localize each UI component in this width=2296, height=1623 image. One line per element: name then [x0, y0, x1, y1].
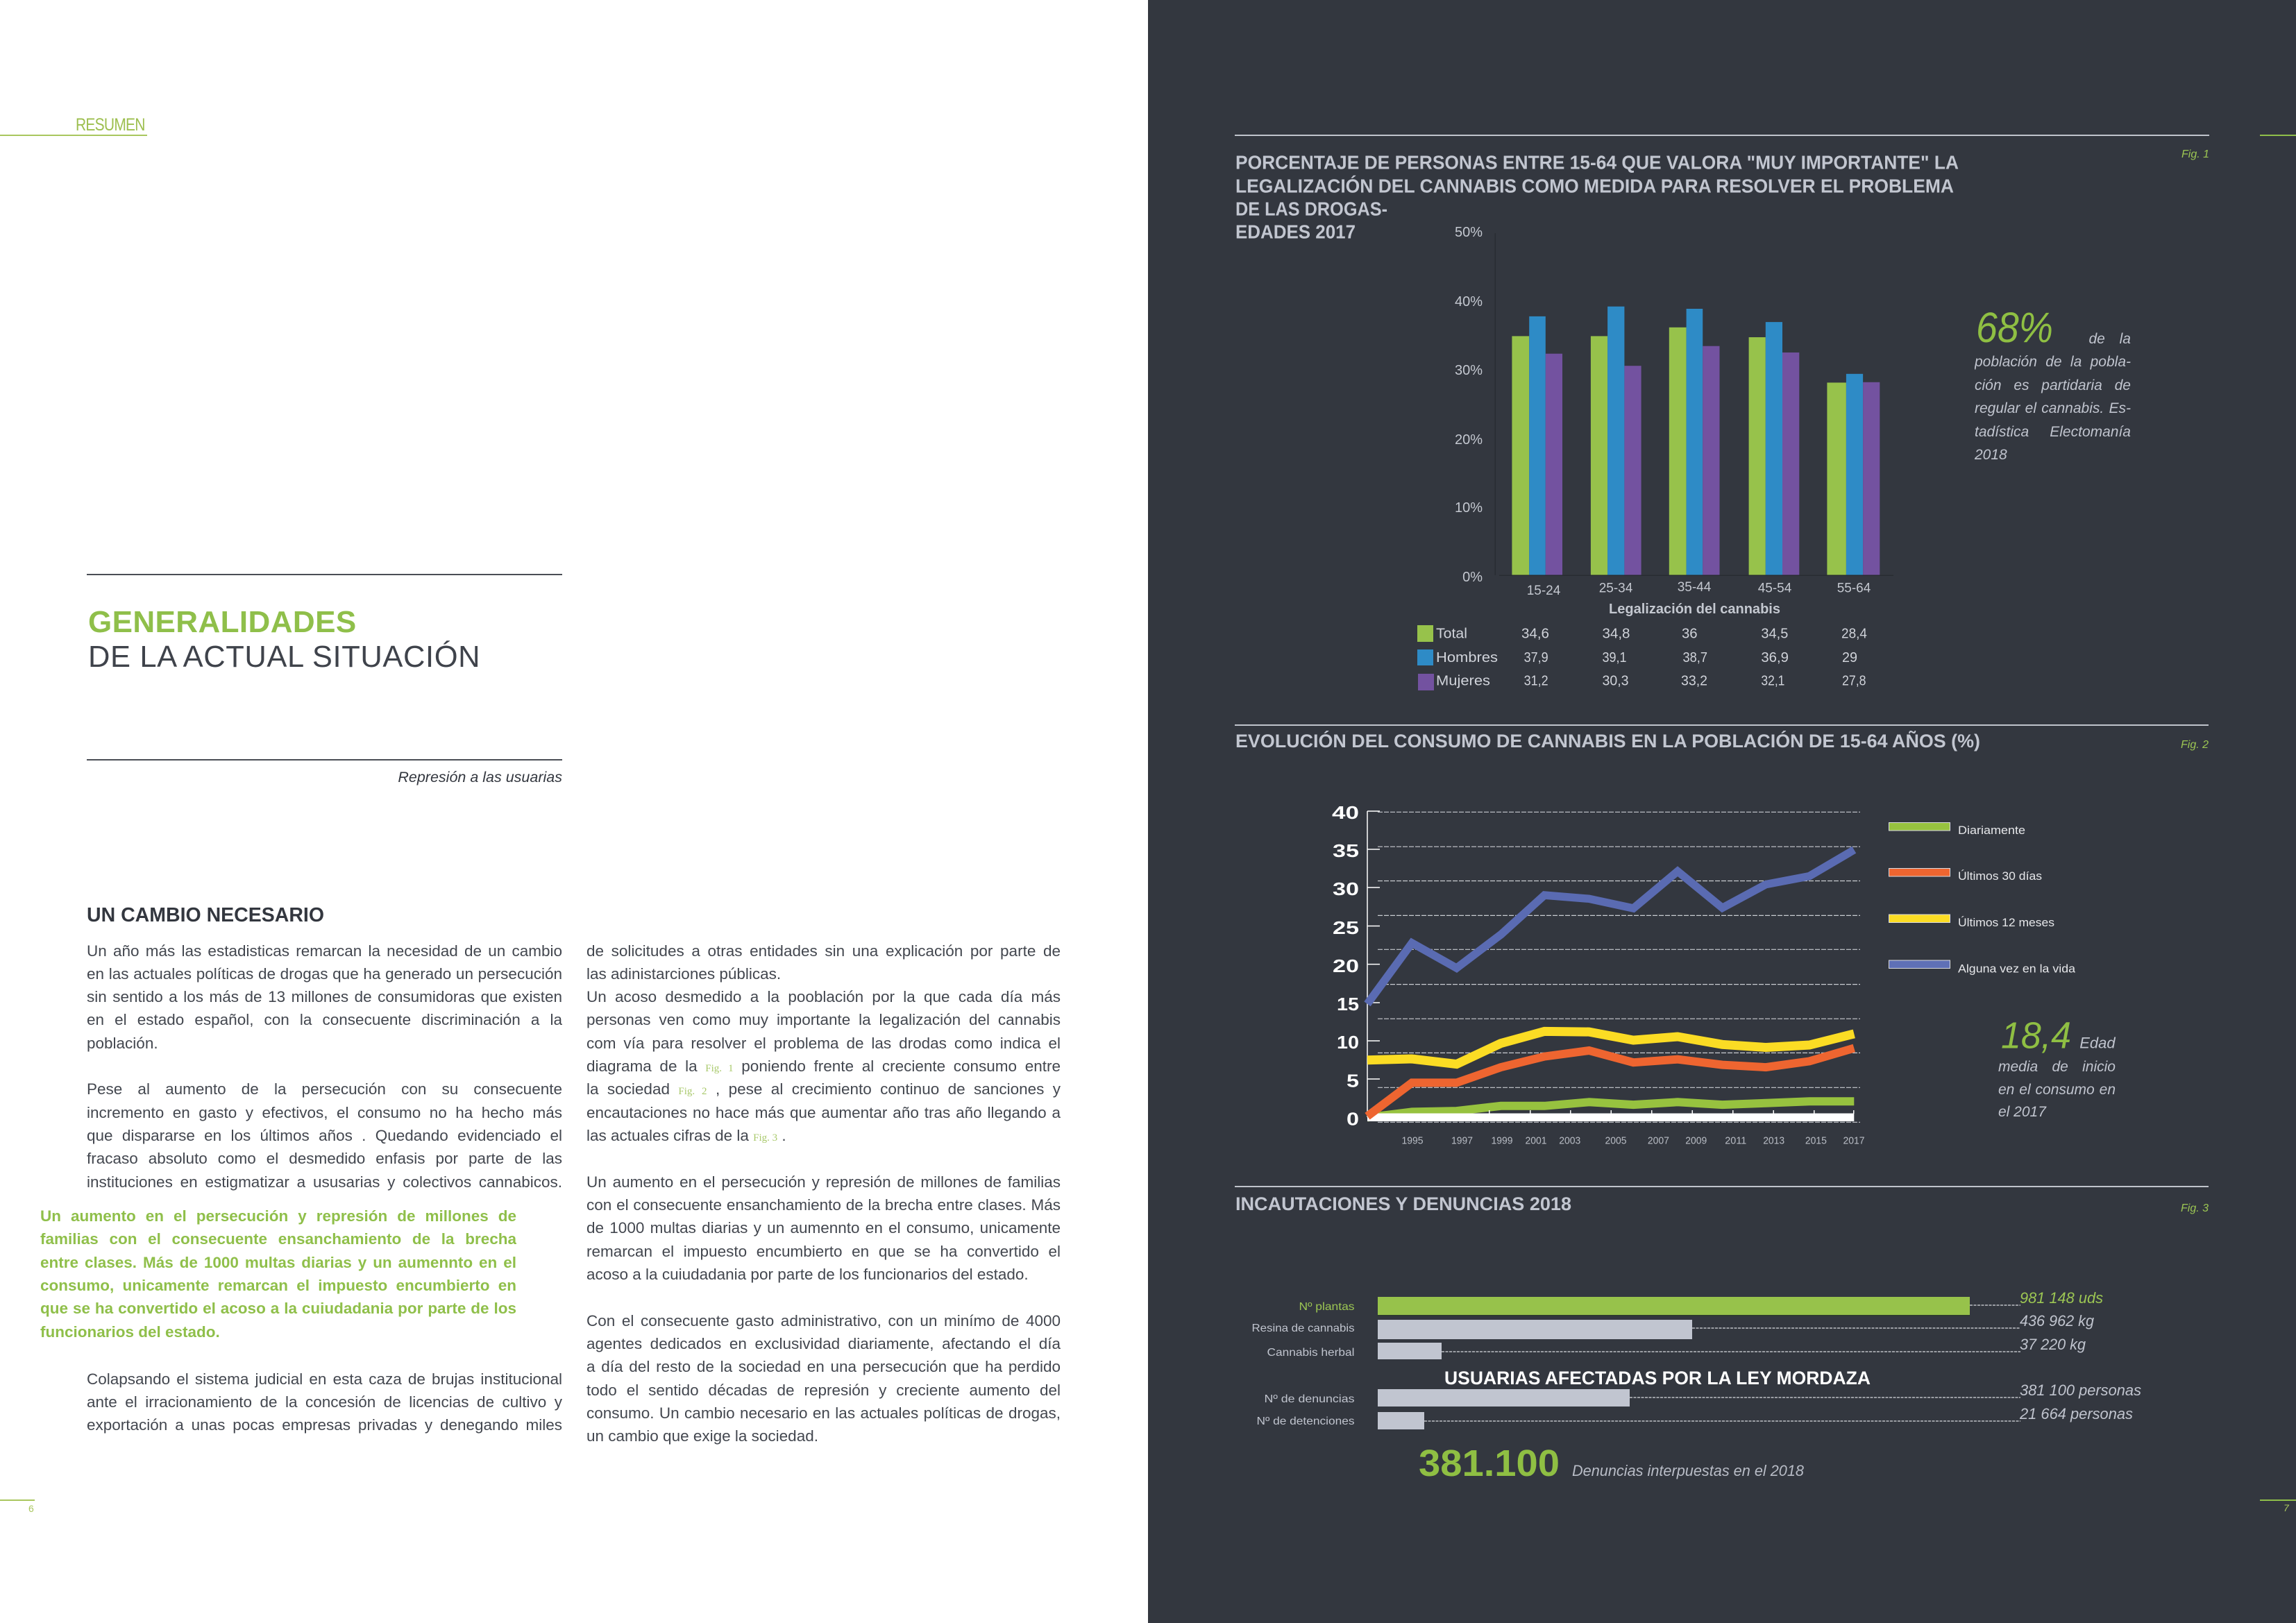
heading: generalidades: GENERALIDADES [88, 605, 357, 639]
x axis year labels: 2007 [1648, 1135, 1669, 1147]
horizontal bars: ley mordaza [1256, 1382, 2141, 1429]
callout: 68% figure: 68% [1976, 304, 2053, 351]
heading: un cambio necesario: UN CAMBIO NECESARIO [87, 904, 324, 926]
figure 3 title: INCAUTACIONES Y DENUNCIAS 2018 [1235, 1193, 1571, 1214]
text column 2: acoso a la cuiudadania por parte de los funcionarios del estado. [586, 1266, 1029, 1283]
text column 2: las adinistarciones públicas. [586, 965, 781, 983]
callout text: 68% description: ción es partidaria de [1975, 377, 2131, 393]
text column 2: Con el consecuente gasto administrativo, con un minímo de 4000 [586, 1312, 1061, 1329]
bars 55-64 [1827, 374, 1880, 575]
pull quote: green highlighted text: consumo, unicamente remarcan el impuesto encumbierto en [40, 1277, 516, 1294]
figure 1 title [1235, 151, 1959, 243]
figure 2 title: EVOLUCIÓN DEL CONSUMO DE CANNABIS EN LA POBLACIÓN DE 15-64 AÑOS (%) [1235, 730, 1980, 751]
x axis labels [1527, 580, 1871, 598]
callout text: 18,4 description: en el consumo en [1998, 1081, 2116, 1098]
callout text: 18,4 description [1998, 1059, 2116, 1120]
text column 2: Un acoso desmedido a la pooblación por la que cada día más [586, 988, 1061, 1005]
data table with legend: Total [1436, 626, 1467, 641]
text column 1: closing paragraph: ante el irracionamiento de la concesión de licencias de cultivo y [87, 1393, 562, 1411]
text column 1: first paragraphs: fracaso absoluto como el desmedido enfasis por parte de las [87, 1150, 562, 1167]
section tag: resumen: RESUMEN [76, 115, 145, 135]
bars 35-44 [1669, 309, 1720, 575]
y axis labels: 0% [1462, 570, 1483, 585]
section tag: resumen [0, 114, 147, 136]
callout text: 68% description: tadística Electomanía [1975, 423, 2131, 440]
data table with legend: 31,2 [1524, 673, 1548, 688]
legend: line chart: Últimos 30 días [1958, 869, 2042, 883]
text column 2: la sociedad Fig. 2 , pese al crecimiento continuo de sanciones y [586, 1080, 1061, 1098]
horizontal bars: seizures [1252, 1289, 2103, 1359]
text column 2: de solicitudes a otras entidades sin una explicación por parte de [586, 942, 1061, 959]
pull quote: green highlighted text: entre clases. Más de 1000 multas diarias y un aumennto en el [40, 1254, 516, 1271]
figure 2 tag: Fig. 2 [2181, 739, 2209, 751]
series: alguna vez en la vida [1367, 850, 1854, 1004]
data table with legend [1417, 625, 1867, 690]
value labels: 436 962 kg [2020, 1312, 2095, 1329]
text column 1: first paragraphs: sin sentido a los más de 13 millones de consumidoras que existen [87, 988, 562, 1005]
category labels: Resina de cannabis [1252, 1323, 1355, 1334]
series: diariamente [1367, 1101, 1854, 1117]
x axis year labels: 2005 [1605, 1135, 1627, 1147]
category labels: Nº de detenciones [1256, 1416, 1355, 1427]
data table with legend: Mujeres [1436, 673, 1490, 688]
data table with legend: 36 [1682, 626, 1698, 641]
x axis labels: 35-44 [1678, 580, 1712, 595]
text column 1: first paragraphs: Un año más las estadisticas remarcan la necesidad de un cambio [87, 942, 562, 959]
figure 1 title: DE LAS DROGAS- [1235, 198, 1387, 219]
text column 2: con el consecuente ensanchamiento de la brecha entre clases. Más [586, 1196, 1061, 1214]
figure 1 title: PORCENTAJE DE PERSONAS ENTRE 15-64 QUE VALORA "MUY IMPORTANTE" LA [1235, 151, 1959, 173]
dark panel: right page [1148, 0, 2296, 1623]
bars 25-34 [1591, 307, 1641, 575]
text column 1: first paragraphs: en el estado español, con la consecuente discriminación a la [87, 1011, 562, 1028]
category labels [1252, 1301, 1355, 1359]
x axis year labels: 2013 [1763, 1135, 1784, 1147]
text column 2: diagrama de la Fig. 1 poniendo frente al creciente consumo entre [586, 1057, 1061, 1075]
x axis labels: 15-24 [1527, 584, 1561, 598]
text column 2: Un aumento en el persecución y represión de millones de familias [586, 1173, 1061, 1191]
pull quote: green highlighted text: Un aumento en el persecución y represión de millones de [40, 1207, 516, 1225]
heading: generalidades [87, 574, 562, 760]
legend: line chart: Diariamente [1958, 824, 2025, 837]
data table with legend: 36,9 [1761, 650, 1789, 665]
value labels: 37 220 kg [2020, 1336, 2086, 1353]
series: últimos 12 meses [1367, 1031, 1854, 1064]
subheading: ley mordaza: USUARIAS AFECTADAS POR LA LEY MORDAZA [1444, 1368, 1871, 1388]
x axis year labels: 2011 [1725, 1135, 1746, 1147]
figure 1 title: LEGALIZACIÓN DEL CANNABIS COMO MEDIDA PARA RESOLVER EL PROBLEMA [1235, 175, 1954, 197]
data table with legend: 29 [1842, 650, 1857, 665]
text column 1: first paragraphs [87, 942, 562, 1191]
legend: line chart: Últimos 12 meses [1958, 916, 2054, 929]
callout text: 18,4 description: el 2017 [1998, 1104, 2046, 1120]
data table with legend: 27,8 [1842, 673, 1866, 688]
text column 2: consumo. Un cambio necesario en las actuales políticas de drogas, [586, 1404, 1061, 1422]
callout text: 68% description: población de la pobla- [1975, 354, 2131, 370]
data table with legend: 39,1 [1602, 650, 1627, 665]
y axis labels: 30 [1333, 878, 1359, 899]
subtitle: represión a las usuarias: Represión a las usuarias [398, 769, 562, 785]
data table with legend: 37,9 [1524, 650, 1548, 665]
callout: 18,4 age: Edad [2079, 1035, 2116, 1052]
text column 1: first paragraphs: instituciones en estigmatizar a ususarias y colectivos cannabicos. [87, 1173, 562, 1191]
text column 2: agentes dedicados en exclusividad diariamente, afectando el día [586, 1335, 1061, 1352]
data table with legend: 28,4 [1841, 626, 1867, 641]
y axis labels: 40% [1455, 294, 1483, 309]
x axis year labels: 1999 [1491, 1135, 1513, 1147]
x axis year labels [1402, 1135, 1864, 1147]
y axis labels: 25 [1333, 917, 1359, 938]
x axis year labels: 2017 [1843, 1135, 1864, 1147]
x axis year labels: 1997 [1451, 1135, 1473, 1147]
category labels: Nº de denuncias [1265, 1393, 1355, 1405]
data table with legend: 34,6 [1521, 626, 1549, 641]
data table with legend: Hombres [1436, 650, 1498, 665]
series: últimos 30 días [1367, 1048, 1854, 1116]
category labels: Nº plantas [1299, 1301, 1355, 1313]
value labels: 21 664 personas [2019, 1405, 2133, 1422]
text column 1: first paragraphs: que dispararse en los últimos años . Quedando evidenciado el [87, 1127, 562, 1144]
callout: 381.100 denuncias: 381.100 [1419, 1443, 1560, 1484]
figure 2 block [1235, 724, 2209, 1147]
chart caption: Legalización del cannabis [1609, 602, 1780, 617]
bars 15-24 [1512, 316, 1562, 575]
figure 1 title: EDADES 2017 [1235, 221, 1356, 243]
callout: 68% figure [1976, 304, 2131, 351]
x axis year labels: 1995 [1402, 1135, 1423, 1147]
callout text: 68% description [1974, 354, 2131, 463]
text column 1: closing paragraph [87, 1370, 562, 1434]
text column 1: first paragraphs: Pese al aumento de la persecución con su consecuente [87, 1080, 562, 1098]
x axis labels: 55-64 [1837, 581, 1871, 596]
text column 2: a día del resto de la sociedad en una persecución que ha perdido [586, 1358, 1061, 1375]
value labels: 381 100 personas [2020, 1382, 2141, 1399]
callout text: 18,4 description: media de inicio [1998, 1059, 2116, 1075]
text column 1: first paragraphs: incremento en gasto y efectivos, el consumo no ha hecho más [87, 1104, 562, 1121]
x axis labels: 25-34 [1599, 581, 1633, 596]
data table with legend: 33,2 [1681, 673, 1707, 688]
y axis labels: 35 [1333, 840, 1359, 861]
y axis labels: 40 [1332, 802, 1359, 823]
page number left: 6 [28, 1503, 34, 1514]
figure 1 tag: Fig. 1 [2181, 148, 2209, 160]
y axis labels [1455, 225, 1483, 585]
callout: 18,4 age [2001, 1015, 2116, 1057]
legend: line chart: Alguna vez en la vida [1958, 962, 2076, 976]
pull quote: green highlighted text: familias con el consecuente ensanchamiento de la brecha [40, 1230, 516, 1248]
y axis labels: 20 [1333, 955, 1359, 976]
text column 2 [586, 942, 1061, 1445]
x axis year labels: 2003 [1559, 1135, 1580, 1147]
figure 3 block [1235, 1186, 2209, 1484]
text column 2: de 1000 multas diarias y un aumennto en el consumo, unicamente [586, 1219, 1061, 1237]
callout: 381.100 denuncias: Denuncias interpuestas en el 2018 [1572, 1462, 1805, 1479]
x axis year labels: 2009 [1685, 1135, 1707, 1147]
y axis labels [1332, 802, 1359, 1129]
data table with legend: 30,3 [1602, 673, 1628, 688]
text column 2: todo el sentido décadas de represión y creciente aumento del [586, 1382, 1061, 1399]
axis base band [1367, 1110, 1855, 1121]
value labels [2019, 1382, 2141, 1422]
pull quote: green highlighted text [40, 1207, 516, 1341]
line chart: consumption trend [1332, 802, 1864, 1147]
text column 1: closing paragraph: exportación a unas pocas empresas privadas y denegando miles [87, 1416, 562, 1434]
value labels: 981 148 uds [2020, 1289, 2103, 1307]
callout: 381.100 denuncias [1419, 1443, 1805, 1484]
text column 1: first paragraphs: población. [87, 1035, 158, 1052]
category labels [1256, 1393, 1355, 1427]
legend: line chart [1889, 823, 2076, 976]
page number right: 7 [2284, 1502, 2290, 1513]
bars 45-54 [1749, 322, 1799, 575]
pull quote: green highlighted text: funcionarios del estado. [40, 1323, 220, 1341]
text column 2: com vía para resolver el problema de las drodas como indica el [586, 1035, 1061, 1052]
callout text: 68% description: regular el cannabis. Es- [1975, 400, 2131, 416]
x axis year labels: 2015 [1805, 1135, 1827, 1147]
y axis labels: 20% [1455, 432, 1483, 448]
text column 1: closing paragraph: Colapsando el sistema judicial en esta caza de brujas institucional [87, 1370, 562, 1388]
data table with legend: 32,1 [1761, 673, 1784, 688]
figure 1 block [1235, 135, 2209, 690]
bar chart: legalización del cannabis [1417, 225, 1893, 690]
text column 2: personas ven como muy importante la legalización del cannabis [586, 1011, 1061, 1028]
text column 1: first paragraphs: en las actuales políticas de drogas que ha generado un persecución [87, 965, 562, 983]
text column 2: las actuales cifras de la Fig. 3 . [586, 1127, 786, 1144]
value labels [2020, 1289, 2103, 1353]
y axis labels: 30% [1455, 363, 1483, 378]
callout: 18,4 age: 18,4 [2001, 1015, 2071, 1057]
y axis labels: 5 [1347, 1071, 1359, 1091]
y axis labels: 50% [1455, 225, 1483, 240]
category labels: Cannabis herbal [1267, 1347, 1355, 1359]
heading: generalidades: DE LA ACTUAL SITUACIÓN [88, 640, 480, 674]
x axis labels: 45-54 [1758, 581, 1792, 596]
data table with legend: 38,7 [1682, 650, 1707, 665]
figure 3 tag: Fig. 3 [2181, 1203, 2209, 1214]
text column 2: remarcan el impuesto encumbierto en que se ha convertido el [586, 1243, 1061, 1260]
data table with legend: 34,5 [1761, 626, 1788, 641]
callout text: 68% description: 2018 [1975, 447, 2007, 463]
accent line top right [2260, 135, 2296, 136]
data table with legend: 34,8 [1602, 626, 1630, 641]
y axis labels: 10% [1455, 500, 1483, 516]
text column 2: encautaciones no hace más que aumentar año tras año llegando a [586, 1104, 1061, 1121]
x axis year labels: 2001 [1526, 1135, 1546, 1147]
y axis labels: 10 [1337, 1032, 1359, 1053]
y axis labels: 15 [1337, 994, 1359, 1014]
callout: 68% figure: de la [2088, 331, 2131, 347]
pull quote: green highlighted text: que se ha convertido el acoso a la cuiudadania por parte de los [40, 1300, 516, 1317]
page number left [0, 1499, 35, 1515]
text column 2: un cambio que exige la sociedad. [586, 1427, 818, 1445]
page number right [2260, 1499, 2296, 1513]
y axis labels: 0 [1347, 1108, 1359, 1129]
